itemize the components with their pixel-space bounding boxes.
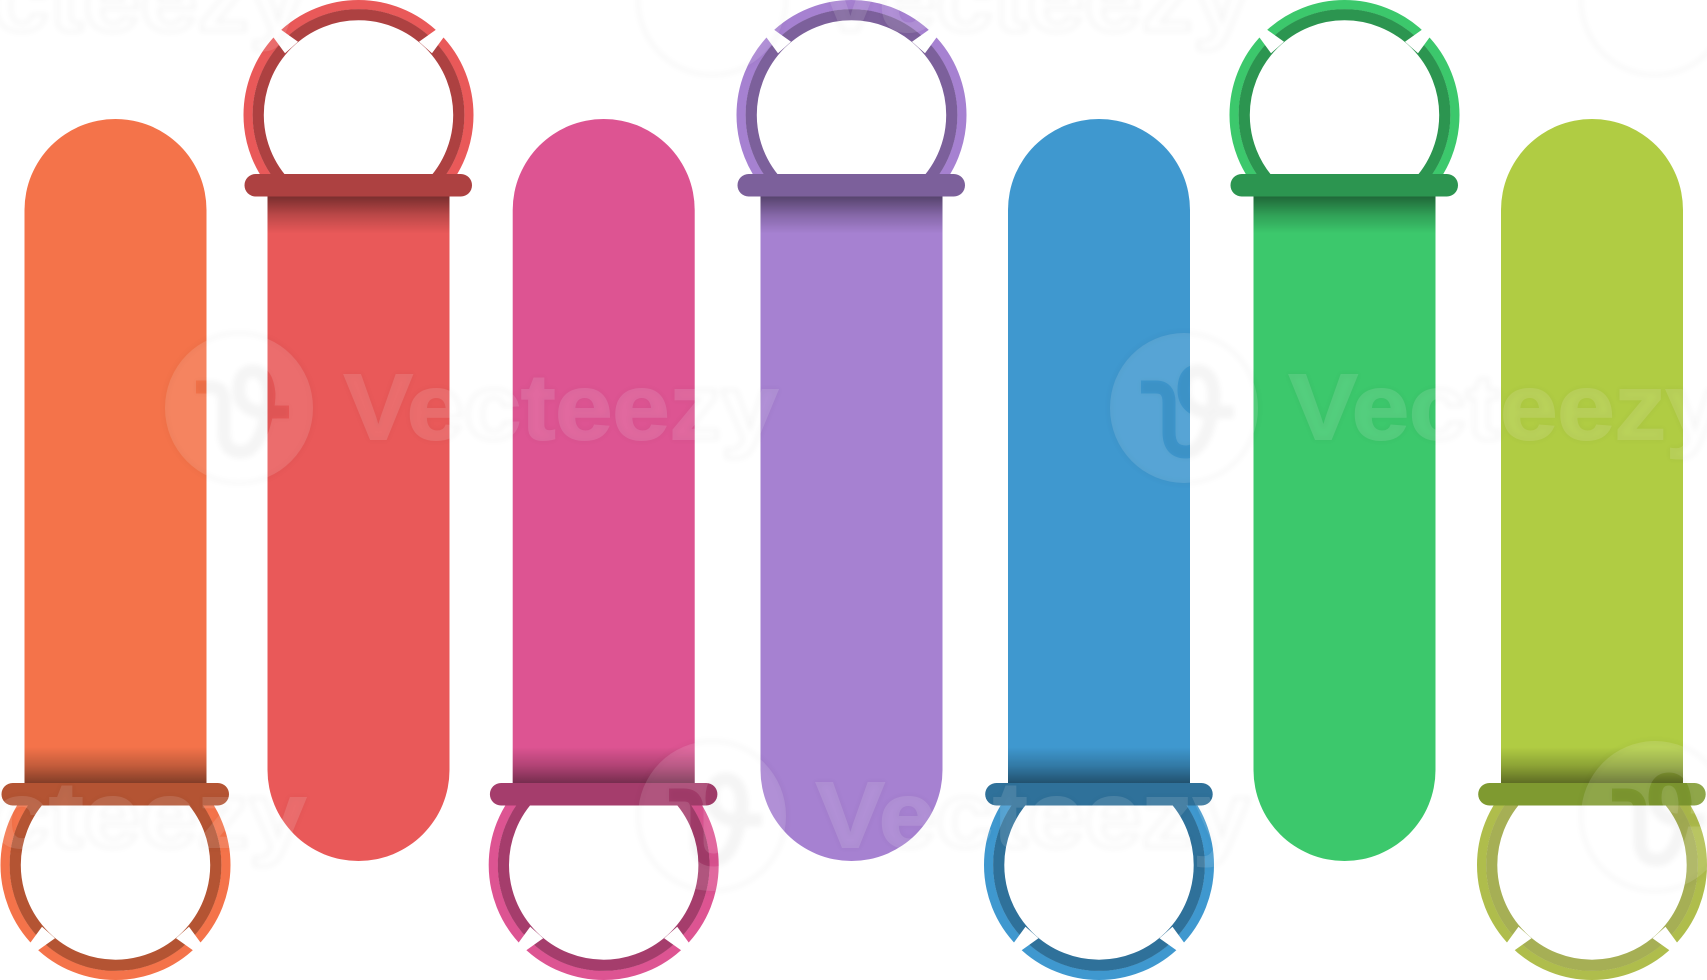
column 1: orange tag [2,119,229,975]
watermark overlay: Vecteezy [1289,355,1707,459]
watermark overlay: Vecteezy [344,355,778,459]
orange bar [24,119,206,790]
column 3: pink tag [490,119,717,975]
column 4: purple tag [738,5,965,861]
pink band [490,783,717,806]
blue bar [1008,119,1190,790]
watermark overlay: Vecteezy [344,355,778,459]
purple band [738,174,965,196]
column 7: olive tag [1478,119,1706,975]
blue band [985,783,1213,806]
olive band [1478,783,1706,806]
orange band [2,783,229,806]
column 6: green tag [1230,5,1458,861]
column 2: red tag [244,5,472,861]
blue ring [989,755,1209,975]
green ring [1234,5,1455,225]
green bar [1254,190,1436,861]
purple bar [760,190,943,861]
olive bar [1501,119,1683,790]
pink ring [493,755,714,975]
watermark overlay: Vecteezy [1289,355,1707,459]
purple ring [741,5,962,225]
red band [244,174,472,196]
olive ring [1482,755,1702,975]
orange ring [5,755,226,975]
pink bar [513,119,695,790]
watermark overlay: Vecteezy [816,763,1250,867]
green band [1230,174,1458,196]
watermark overlay: Vecteezy [816,763,1250,867]
red bar [268,190,450,861]
column 5: blue tag [985,119,1213,975]
red ring [248,5,469,225]
